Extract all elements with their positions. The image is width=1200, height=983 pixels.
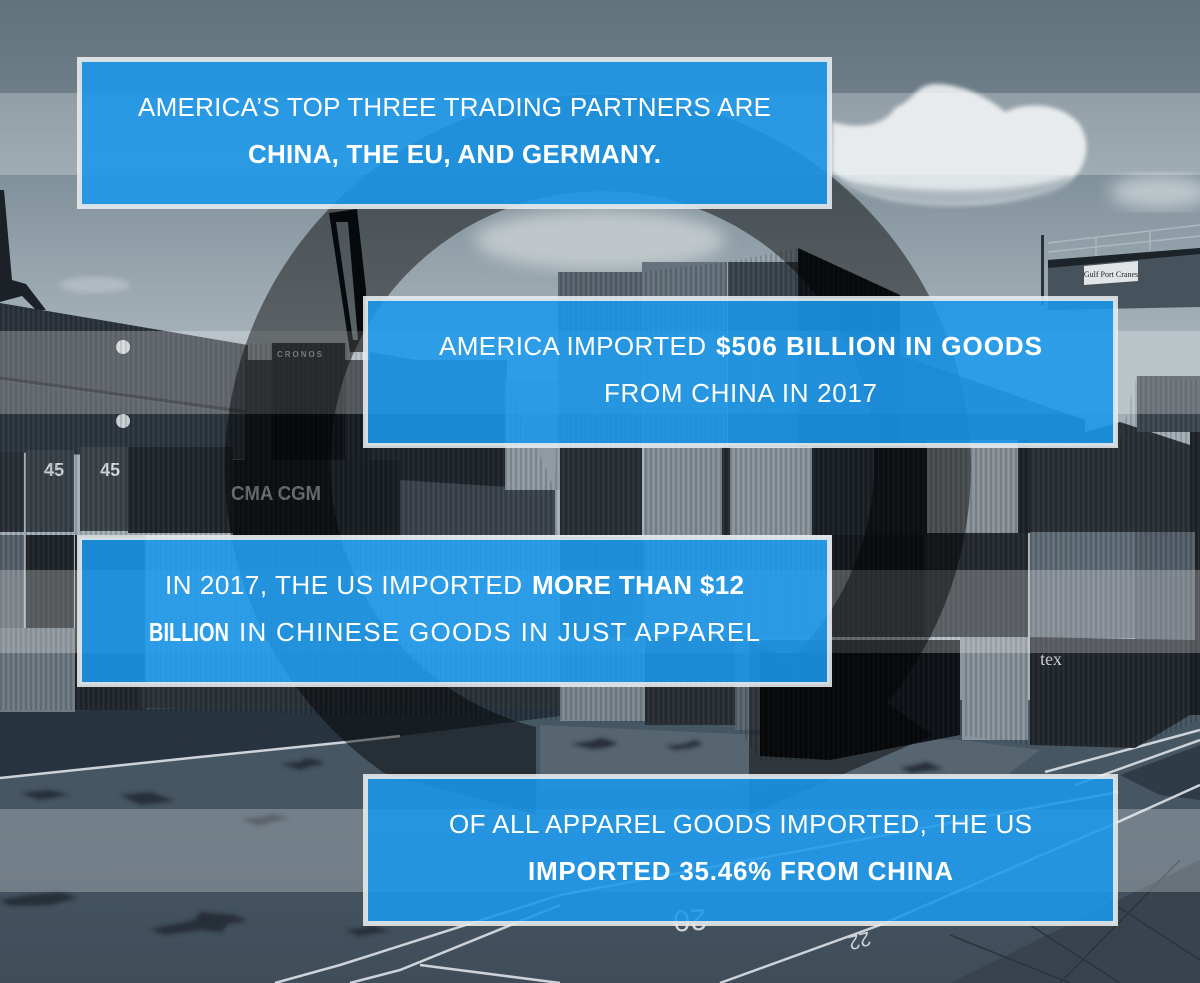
ground (0, 700, 1200, 983)
ground numbers: 20 (672, 902, 708, 937)
text: imports from China: FROM CHINA IN 2017 (604, 378, 877, 408)
text: apparel imports value: BILLION (149, 617, 229, 647)
tar marks (0, 738, 944, 936)
corrugation stripes on containers (0, 248, 1199, 760)
text: apparel imports value (149, 570, 760, 647)
text: apparel imports value: IN 2017, THE US IMPORTED (165, 570, 522, 600)
text: apparel import share: OF ALL APPAREL GOODS IMPORTED, THE US (449, 809, 1032, 839)
text: apparel imports value: IN CHINESE GOODS IN JUST APPAREL (239, 617, 760, 647)
left crane (0, 190, 46, 310)
left container stacks: 45 (44, 460, 64, 480)
text: trading partners: CHINA, THE EU, AND GERMANY. (248, 139, 661, 169)
text: apparel imports value: MORE THAN $12 (532, 570, 744, 600)
text: imports from China: $506 BILLION IN GOODS (716, 331, 1042, 361)
text: trading partners (138, 92, 771, 169)
panel: apparel imports value (80, 538, 830, 684)
left container stacks: CRONOS (277, 350, 324, 359)
left container stacks: 45 (100, 460, 120, 480)
text: apparel import share: IMPORTED 35.46% FROM CHINA (528, 856, 953, 886)
text: trading partners: AMERICA’S TOP THREE TRADING PARTNERS ARE (138, 92, 771, 122)
clouds (60, 84, 1200, 293)
right container stacks: tex (1040, 649, 1062, 669)
text: imports from China (439, 331, 1042, 408)
right container stacks (558, 248, 1200, 760)
left container stacks: CMA CGM (231, 483, 321, 505)
panel: imports from China (366, 298, 1116, 446)
text: imports from China: AMERICA IMPORTED (439, 331, 706, 361)
panel: apparel import share (366, 776, 1116, 924)
left container stacks (0, 303, 560, 712)
gantry crane: Gulf Port Cranes (1084, 270, 1138, 279)
circular arrow graphic (225, 94, 971, 815)
text: apparel import share (449, 809, 1032, 886)
gantry crane (1041, 225, 1200, 310)
panel: top three trading partners (80, 60, 830, 206)
sky (0, 0, 1200, 720)
ground: 22 (846, 927, 873, 954)
tall crane tower (329, 209, 367, 352)
